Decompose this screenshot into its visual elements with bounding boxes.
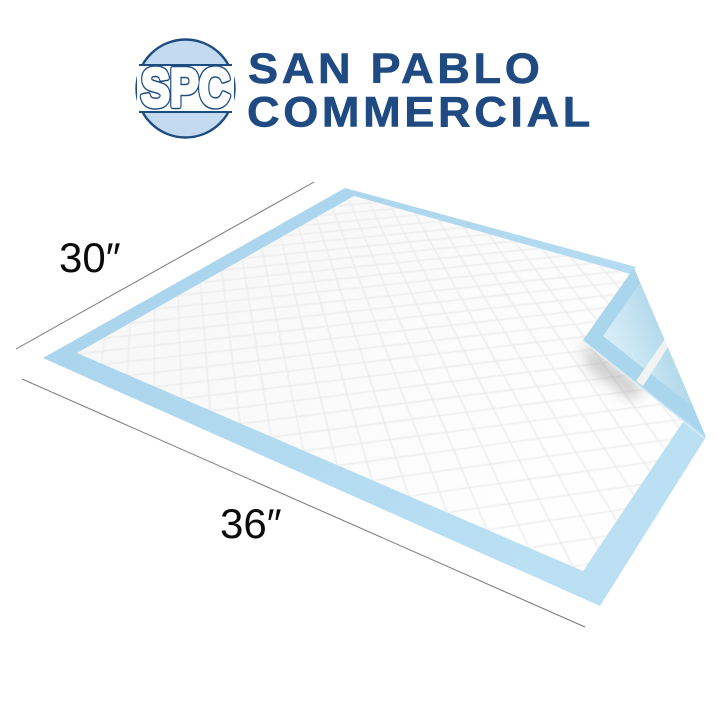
logo wordmark: San Pablo Commercial: SAN PABLO (248, 45, 540, 93)
shadow cast by folded corner (583, 340, 645, 400)
pad blue border (43, 188, 706, 606)
logo wordmark: San Pablo Commercial (247, 45, 590, 136)
dimension line: 30 inch side (16, 182, 314, 349)
logo: SPC circle emblem: SPC (141, 58, 230, 118)
folded corner (583, 268, 706, 438)
logo: SPC circle emblem (136, 40, 234, 138)
quilted absorbent surface (77, 196, 683, 571)
dimension line: 36 inch side (22, 379, 585, 627)
logo: SPC circle emblem: SPC (141, 58, 230, 118)
underpad with quilted surface and folded corner (43, 188, 706, 606)
dimension label: 30 inches: 30″ (59, 234, 121, 281)
infographic canvas (16, 38, 706, 628)
logo wordmark: San Pablo Commercial: COMMERCIAL (247, 88, 590, 136)
dimension label: 36 inches: 36″ (220, 500, 282, 547)
